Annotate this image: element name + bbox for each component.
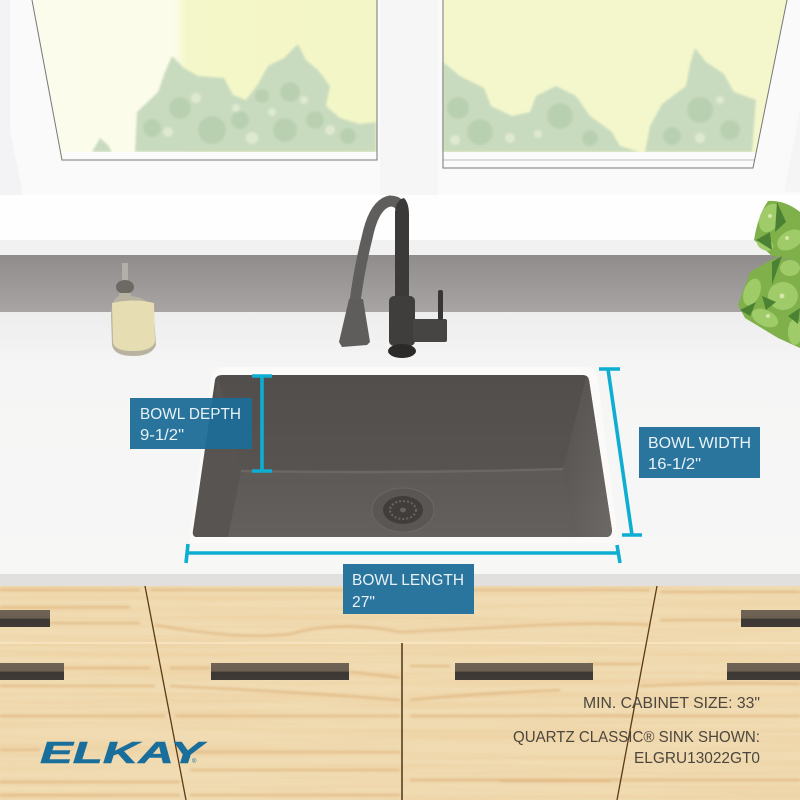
faucet — [339, 198, 447, 358]
logo: Elkay — [40, 735, 208, 770]
depth label box: 9-1/2" — [140, 427, 184, 444]
faucet spout — [355, 201, 402, 302]
width label box: 16-1/2" — [648, 456, 701, 473]
note: cabinet size and model: QUARTZ CLASSIC® SINK SHOWN: — [513, 729, 760, 746]
logo: Elkay: ® — [192, 758, 197, 765]
faucet body — [395, 198, 409, 296]
wood grain streaks — [0, 590, 800, 795]
window frame wall — [0, 0, 800, 235]
length label box: 27" — [352, 594, 375, 611]
window sill — [0, 195, 800, 255]
right window pane — [443, 0, 787, 168]
drain — [372, 488, 434, 532]
length label box: BOWL LENGTH — [352, 572, 464, 589]
sink bowl — [193, 375, 612, 537]
soap bottle — [111, 263, 156, 356]
plant — [738, 200, 800, 348]
logo: Elkay: ELKAY — [40, 735, 208, 770]
dimension: bowl length — [186, 544, 620, 614]
left window pane — [32, 0, 377, 160]
sink rim — [190, 367, 618, 543]
countertop — [0, 312, 800, 587]
cabinet handles — [0, 610, 800, 680]
wood cabinets — [0, 586, 800, 800]
cabinet door seams — [0, 586, 800, 800]
bushes in left window — [92, 44, 376, 152]
width label box: BOWL WIDTH — [648, 435, 751, 452]
note: cabinet size and model: ELGRU13022GT0 — [634, 750, 760, 767]
note: cabinet size and model: MIN. CABINET SIZE: 33" — [583, 695, 760, 712]
bushes in right window — [443, 48, 756, 152]
backsplash — [0, 255, 800, 313]
bowl floor — [228, 469, 575, 537]
width label box — [639, 427, 760, 478]
faucet handle — [413, 319, 447, 342]
dimension: bowl width — [599, 369, 760, 535]
length label box — [343, 564, 474, 614]
dimension: bowl depth — [130, 376, 272, 471]
depth label box: BOWL DEPTH — [140, 406, 241, 423]
bowl right wall — [563, 377, 612, 537]
bowl left wall — [193, 376, 241, 537]
depth label box — [130, 398, 252, 449]
note: cabinet size and model — [513, 695, 760, 767]
